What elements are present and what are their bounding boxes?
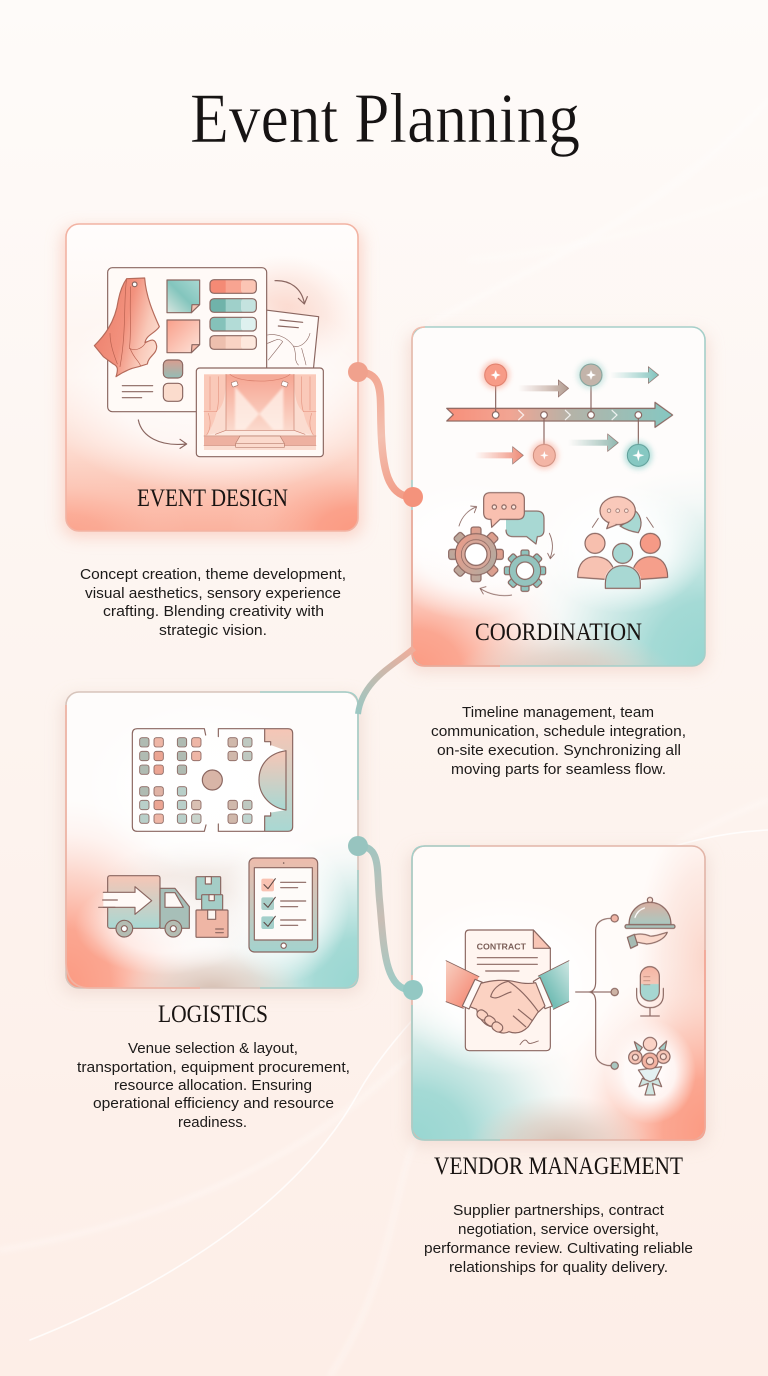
text: logistics description: readiness.	[178, 1115, 247, 1131]
text: vendor management description: relationships for quality delivery.	[449, 1260, 668, 1276]
text: event design description: visual aesthetics, sensory experience	[85, 586, 341, 602]
icon: large gear	[449, 527, 503, 582]
milestone circle: coral	[482, 361, 510, 389]
milestone stems	[496, 385, 638, 445]
icon: small gear	[504, 550, 546, 591]
text: coordination description: moving parts for seamless flow.	[451, 762, 666, 778]
icon: handshake	[446, 961, 569, 1034]
heading: logistics: LOGISTICS	[158, 1001, 268, 1028]
text: logistics description: Venue selection & layout,	[128, 1041, 298, 1057]
heading: event design: EVENT DESIGN	[137, 485, 288, 512]
icon: contract: CONTRACT	[477, 941, 526, 951]
icon: coral speech bubble	[484, 493, 524, 527]
text: vendor management description	[424, 1203, 693, 1276]
icon: board	[108, 268, 267, 412]
icon: catering cloche	[625, 897, 675, 948]
icon: contract	[465, 930, 550, 1051]
icon: cycle arrows	[459, 506, 554, 596]
text: coordination description: Timeline management, team	[462, 705, 654, 721]
text: event design description	[80, 567, 346, 639]
text: event design description: Concept creation, theme development,	[80, 567, 346, 583]
illustration: contract and vendors	[446, 897, 675, 1095]
icon: microphone	[637, 967, 663, 1016]
icon: bouquet	[629, 1037, 670, 1095]
milestone circle: grey	[577, 361, 605, 389]
icon: colour strips	[210, 280, 256, 349]
icon: tablet checklist	[249, 858, 318, 952]
text: logistics description	[77, 1041, 350, 1131]
heading: coordination: COORDINATION	[475, 619, 642, 646]
icon: branch connector	[576, 915, 618, 1069]
text: event design description: crafting. Blending creativity with	[103, 604, 324, 620]
text: vendor management description: performance review. Cultivating reliable	[424, 1241, 693, 1257]
connector: design to coordination	[348, 362, 423, 507]
icon: small swatches	[163, 360, 183, 401]
text: coordination description: communication, schedule integration,	[431, 724, 686, 740]
icon: boxes	[196, 877, 228, 937]
milestone circle: teal	[624, 441, 652, 469]
icon: teal swatch	[167, 280, 200, 313]
icon: fabric drape	[94, 278, 159, 377]
text: event design description: strategic vision.	[159, 623, 267, 639]
arrows	[475, 367, 659, 464]
icon: stage frame	[196, 368, 323, 457]
panel: coordination	[411, 326, 706, 667]
connector: logistics to vendor management	[348, 836, 423, 1000]
icon: truck	[99, 876, 189, 937]
panel: vendor management	[411, 845, 706, 1141]
text lines	[122, 386, 153, 398]
chevrons	[518, 410, 617, 420]
illustration: logistics	[99, 729, 318, 952]
heading: vendor management: VENDOR MANAGEMENT	[434, 1153, 683, 1180]
title: Event Planning	[190, 80, 580, 158]
illustration: timeline	[447, 361, 673, 596]
icon: timeline bar	[447, 402, 673, 427]
icon: sketch paper	[260, 309, 319, 370]
panel: event design	[65, 223, 359, 532]
milestone nodes	[492, 412, 642, 418]
icon: coral swatch	[167, 320, 200, 353]
milestone circle: peach	[530, 441, 558, 469]
text: logistics description: resource allocation. Ensuring	[114, 1078, 312, 1094]
connector: coordination to logistics	[358, 648, 414, 714]
icon: team	[578, 497, 668, 588]
illustration: mood board	[94, 268, 323, 457]
icon: seats	[140, 738, 252, 823]
text: logistics description: transportation, equipment procurement,	[77, 1060, 350, 1076]
text: logistics description: operational efficiency and resource	[93, 1096, 334, 1112]
icon: floor plan	[132, 729, 293, 831]
text: coordination description: on-site execution. Synchronizing all	[437, 743, 681, 759]
text: coordination description	[431, 705, 686, 778]
icon: curved arrows	[138, 281, 307, 448]
text: vendor management description: Supplier partnerships, contract	[453, 1203, 664, 1219]
icon: teal speech bubble	[506, 511, 544, 544]
panel: logistics	[65, 691, 359, 989]
card shadows	[62, 228, 708, 1146]
text: vendor management description: negotiation, service oversight,	[458, 1222, 659, 1238]
